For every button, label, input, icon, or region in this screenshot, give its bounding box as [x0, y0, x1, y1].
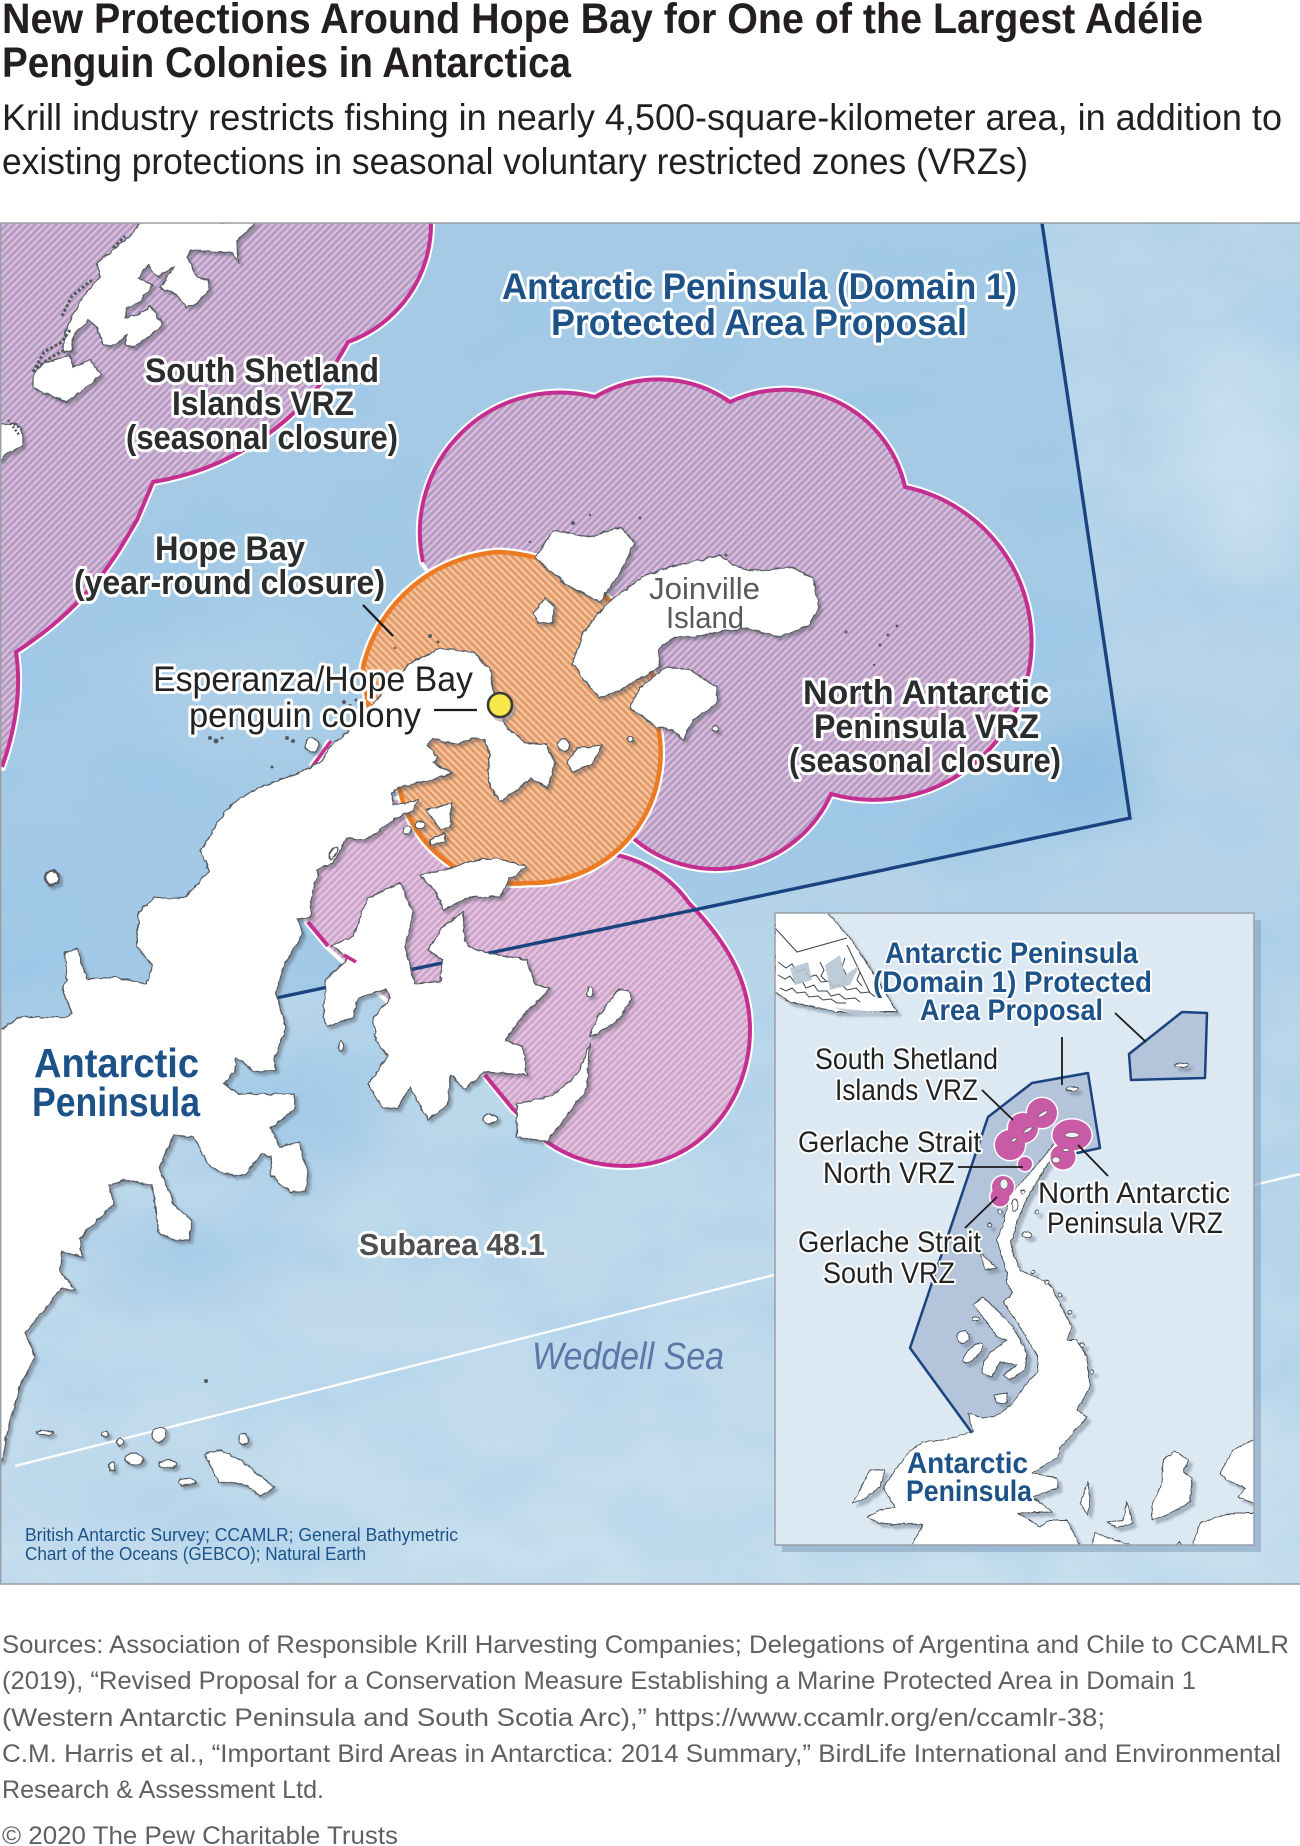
- zone: North Antarctic Peninsula VRZ lower: [300, 800, 750, 1166]
- sources text: C.M. Harris et al., “Important Bird Areas in Antarctica: 2014 Summary,” BirdLife International and Environmental: [2, 1740, 1281, 1768]
- label: Antarctic Peninsula: Antarctic: [34, 1040, 199, 1086]
- inset label: North Antarctic Peninsula VRZ: Peninsula VRZ: [1047, 1207, 1223, 1240]
- land masses: [0, 222, 819, 1497]
- title: [2, 0, 1203, 87]
- label: Hope Bay: [74, 530, 385, 602]
- label: Joinville Island: Joinville: [649, 571, 760, 606]
- land: Joinville Island: [572, 555, 819, 698]
- inset: VRZ blobs: [989, 1096, 1093, 1208]
- zone: North Antarctic Peninsula VRZ upper: [420, 379, 1032, 869]
- label: Joinville Island: [649, 571, 760, 635]
- land: Seymour Island: [590, 989, 632, 1037]
- land: D'Urville island: [630, 667, 717, 740]
- inset label: Gerlache Strait South VRZ: [798, 1226, 982, 1290]
- leader line: Hope Bay: [363, 605, 393, 636]
- inset label: Gerlache Strait North VRZ: [798, 1126, 982, 1190]
- label: Subarea 48.1: Subarea 48.1: [359, 1227, 545, 1262]
- inset: proposed area polygons: [910, 1012, 1207, 1433]
- label: North Antarctic Peninsula VRZ: Peninsula VRZ: [814, 708, 1039, 746]
- sources text: [2, 1631, 1289, 1804]
- small rock specks: [8, 236, 898, 1383]
- inset: South American coast detail: [775, 928, 883, 1003]
- land: Dundee-side northern island: [535, 527, 635, 602]
- label: Antarctic Peninsula Domain 1 proposal: Protected Area Proposal: [551, 302, 967, 343]
- land: small island in Hope Bay zone: [533, 598, 555, 623]
- panel: main map: [0, 222, 1300, 1584]
- label: Antarctic Peninsula Domain 1 proposal: Antarctic Peninsula (Domain 1): [502, 266, 1017, 307]
- inset label: Gerlache Strait North VRZ: Gerlache Strait: [798, 1126, 982, 1159]
- zone: Hope Bay year-round closure: [363, 552, 661, 884]
- map data attribution: British Antarctic Survey; CCAMLR; General Bathymetric: [25, 1525, 458, 1545]
- label: Antarctic Peninsula: Peninsula: [32, 1079, 201, 1125]
- sources text: Sources: Association of Responsible Krill Harvesting Companies; Delegations of Argentina and Chile to CCAMLR: [2, 1631, 1289, 1659]
- magenta boundary fragment on the west coast: [312, 741, 331, 767]
- subarea boundary line: [15, 1174, 1300, 1466]
- inset label: Antarctic Peninsula: Antarctic: [907, 1447, 1028, 1480]
- inset label: Gerlache Strait South VRZ: South VRZ: [823, 1257, 955, 1290]
- map data attribution: Chart of the Oceans (GEBCO); Natural Earth: [25, 1544, 366, 1564]
- proposed protected area boundary: [276, 223, 1130, 998]
- map frame: [1, 223, 1300, 1584]
- land: Snow Hill Island: [517, 1044, 590, 1142]
- inset label: Antarctic Peninsula: Peninsula: [906, 1475, 1032, 1508]
- inset label: South Shetland Islands VRZ: [815, 1043, 998, 1107]
- inset: land: [775, 908, 1260, 1552]
- map data attribution: [25, 1525, 458, 1564]
- zone outline: Hope Bay: [363, 552, 661, 884]
- label: Hope Bay: (year-round closure): [74, 564, 385, 602]
- inset label: North Antarctic Peninsula VRZ: North Antarctic: [1038, 1177, 1230, 1210]
- label: North Antarctic Peninsula VRZ: [789, 674, 1061, 780]
- label: Esperanza/Hope Bay penguin colony: [153, 660, 473, 735]
- label: South Shetland Islands VRZ: [126, 352, 398, 457]
- land: islets in the lower map: [37, 871, 593, 1497]
- label: Antarctic Peninsula Domain 1 proposal: [502, 266, 1017, 343]
- land: South Shetland Islands: [0, 222, 257, 462]
- inset label: Domain 1 proposal: [873, 937, 1152, 1027]
- label: South Shetland Islands VRZ: South Shetland: [145, 352, 379, 390]
- zone: South Shetland Islands VRZ: [0, 223, 431, 767]
- sources text: Research & Assessment Ltd.: [2, 1776, 324, 1804]
- icon: penguin colony marker: [488, 693, 516, 722]
- inset label: Gerlache Strait North VRZ: North VRZ: [823, 1157, 955, 1190]
- inset label: South Shetland Islands VRZ: South Shetland: [815, 1043, 998, 1076]
- sources text: (2019), “Revised Proposal for a Conservation Measure Establishing a Marine Protected Area in Domain 1: [2, 1667, 1196, 1695]
- inset: South American fjord shading: [790, 955, 898, 1017]
- title: Penguin Colonies in Antarctica: [2, 39, 572, 87]
- subtitle: existing protections in seasonal voluntary restricted zones (VRZs): [2, 141, 1028, 182]
- inset label: Domain 1 proposal: (Domain 1) Protected: [873, 966, 1152, 999]
- label: Joinville Island: Island: [666, 600, 744, 635]
- land: islets around the Hope Bay zone: [305, 726, 718, 861]
- magenta boundary fragment stroke: [312, 741, 331, 767]
- land: small island south of colony: [567, 745, 602, 772]
- zone outline: North Antarctic Peninsula VRZ upper: [420, 379, 1032, 869]
- subtitle: Krill industry restricts fishing in nearly 4,500-square-kilometer area, in addition to: [2, 97, 1282, 138]
- label: Weddell Sea: Weddell Sea: [532, 1336, 724, 1378]
- subtitle: [2, 97, 1282, 182]
- inset: channel beside Alexander Island: [1003, 1302, 1038, 1383]
- land: Antarctic Peninsula: [0, 648, 555, 1465]
- land: James Ross Island: [323, 883, 550, 1120]
- label: Esperanza/Hope Bay penguin colony: penguin colony: [189, 696, 421, 735]
- label: South Shetland Islands VRZ: (seasonal closure): [126, 419, 398, 457]
- inset label: South Shetland Islands VRZ: Islands VRZ: [835, 1074, 978, 1107]
- inset label: Domain 1 proposal: Antarctic Peninsula: [885, 937, 1138, 970]
- sources text: (Western Antarctic Peninsula and South Scotia Arc),” https://www.ccamlr.org/en/ccamlr-38;: [2, 1704, 1105, 1732]
- inset: leader lines: [958, 1013, 1146, 1228]
- inset label: Gerlache Strait South VRZ: Gerlache Strait: [798, 1226, 982, 1259]
- label: Esperanza/Hope Bay penguin colony: Esperanza/Hope Bay: [153, 660, 473, 699]
- label: South Shetland Islands VRZ: Islands VRZ: [172, 385, 354, 423]
- label: Antarctic Peninsula: [32, 1040, 201, 1125]
- land: Vega Island: [420, 858, 527, 910]
- inset label: Domain 1 proposal: Area Proposal: [920, 994, 1103, 1027]
- inset label: Antarctic Peninsula: [906, 1447, 1032, 1508]
- magenta tick on James Ross bay: [344, 955, 356, 962]
- label: Hope Bay: Hope Bay: [155, 530, 305, 568]
- zone outline: lower VRZ: [308, 855, 750, 1166]
- label: North Antarctic Peninsula VRZ: (seasonal closure): [789, 742, 1061, 780]
- leader line: penguin colony: [434, 709, 477, 711]
- panel: locator inset map: [775, 908, 1261, 1552]
- label: North Antarctic Peninsula VRZ: North Antarctic: [803, 674, 1049, 712]
- inset label: North Antarctic Peninsula VRZ: [1038, 1177, 1230, 1240]
